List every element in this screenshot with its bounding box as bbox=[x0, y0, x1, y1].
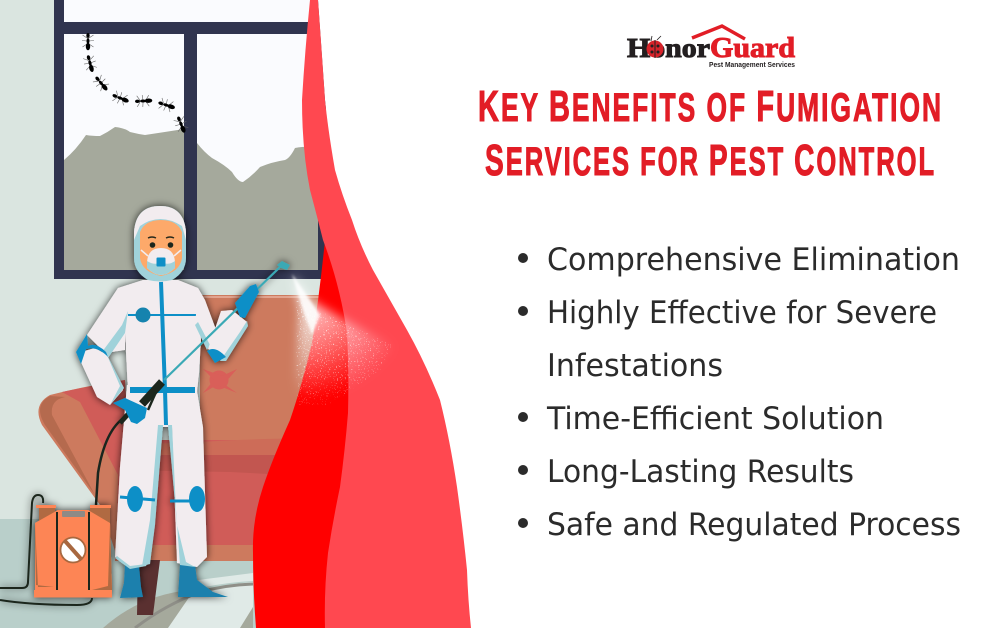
legs bbox=[115, 385, 207, 568]
scene: floor bbox=[0, 519, 350, 628]
sofa leg bbox=[137, 560, 160, 615]
window bbox=[54, 0, 326, 279]
respirator mask bbox=[141, 248, 181, 275]
ladybug icon bbox=[646, 36, 664, 58]
bullet 2: Highly Effective for Severe bbox=[547, 295, 937, 331]
bullet 5: Safe and Regulated Process bbox=[547, 507, 961, 543]
prohibition symbol bbox=[60, 538, 86, 562]
logo roof bbox=[692, 26, 745, 39]
sofa stain bbox=[203, 369, 237, 393]
bullet 3: Time-Efficient Solution bbox=[546, 401, 884, 437]
bullet 1: Comprehensive Elimination bbox=[547, 242, 960, 278]
sofa arm bbox=[38, 380, 135, 560]
right arm bbox=[195, 288, 248, 363]
curtain: dark red layer bbox=[253, 240, 365, 628]
title line 2: SERVICES FOR PEST CONTROL bbox=[485, 136, 936, 185]
benefits list bbox=[518, 242, 961, 543]
spray mist bbox=[292, 274, 395, 410]
boots bbox=[120, 565, 228, 598]
suit seams bbox=[128, 282, 198, 425]
logo tagline: Pest Management Services bbox=[709, 62, 795, 69]
face bbox=[140, 220, 182, 276]
backpack sprayer hose bbox=[96, 417, 125, 505]
sofa bbox=[38, 295, 345, 615]
title bbox=[478, 82, 943, 185]
bullet 2: Infestations bbox=[547, 348, 723, 384]
logo: Guard bbox=[710, 33, 795, 64]
backpack sprayer tank bbox=[0, 495, 112, 605]
mountains in window bbox=[64, 127, 318, 270]
curtain: light red layer bbox=[302, 0, 471, 628]
chest badge bbox=[136, 308, 150, 322]
knee patches bbox=[120, 486, 205, 512]
torso bbox=[87, 280, 201, 392]
head hood bbox=[134, 206, 186, 282]
left arm bbox=[76, 334, 124, 405]
scene: room wall bbox=[0, 0, 350, 628]
bullet 2 bbox=[518, 295, 937, 384]
logo wordmark: Honor bbox=[627, 33, 710, 63]
gloved hand bbox=[113, 398, 147, 424]
bullet 4: Long-Lasting Results bbox=[547, 454, 854, 490]
logo bbox=[627, 26, 795, 69]
worker in protective suit bbox=[76, 206, 290, 598]
ants trail bbox=[82, 33, 190, 135]
spray wand bbox=[120, 261, 290, 423]
white background right of curtain bbox=[318, 0, 1000, 628]
